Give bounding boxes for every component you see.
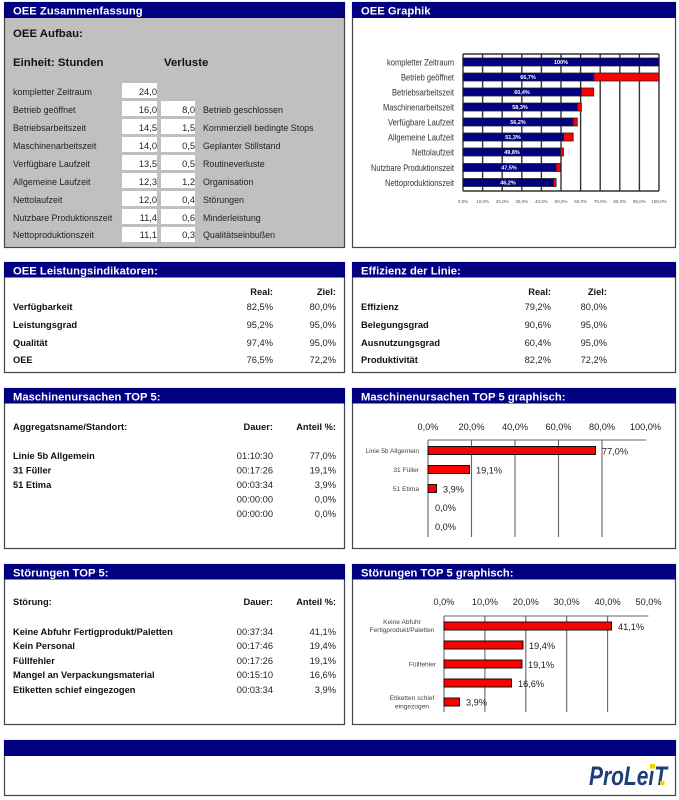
table: time values and losses bbox=[13, 83, 314, 242]
header: OEE Leistungsindikatoren: OEE Leistungsindikatoren: bbox=[13, 266, 158, 278]
table: machine causes: Linie 5b Allgemein bbox=[13, 451, 95, 461]
chart: machine causes bars bbox=[365, 422, 661, 537]
chart: OEE stacked bars: 20,0% bbox=[496, 199, 509, 204]
table: disturbances: Störung: bbox=[13, 597, 52, 607]
table: machine causes: 3,9% bbox=[315, 480, 336, 490]
header: Maschinenursachen TOP 5 bbox=[4, 388, 345, 404]
table: time values and losses: 0,6 bbox=[182, 213, 195, 223]
chart: disturbance bars bbox=[370, 597, 662, 712]
table: time values and losses: Qualitätseinbußen bbox=[203, 230, 275, 240]
table: time values and losses: 11,1 bbox=[140, 230, 157, 240]
table: disturbances: Mangel an Verpackungsmaterial bbox=[13, 670, 155, 680]
table: time values and losses: Nutzbare Produktionszeit bbox=[13, 213, 113, 223]
table: disturbances: 19,1% bbox=[310, 656, 336, 666]
panel: OEE Zusammenfassung bbox=[4, 2, 345, 248]
chart: machine causes bars: 51 Etima bbox=[393, 486, 419, 493]
table: line efficiency values: Real: bbox=[528, 287, 551, 297]
table: line efficiency values bbox=[361, 287, 607, 365]
chart: OEE stacked bars: 66,7% bbox=[520, 75, 536, 81]
table: disturbances: 3,9% bbox=[315, 685, 336, 695]
table: KPI values: 72,2% bbox=[310, 355, 336, 365]
table: disturbances: 00:17:46 bbox=[237, 641, 273, 651]
chart: disturbance bars: 19,1% bbox=[528, 660, 554, 670]
chart: disturbance bars: 10,0% bbox=[472, 597, 498, 607]
chart: OEE stacked bars: 60,0% bbox=[574, 199, 587, 204]
chart: OEE stacked bars: 40,0% bbox=[535, 199, 548, 204]
table: time values and losses: 1,2 bbox=[182, 177, 195, 187]
table: time values and losses: Maschinenarbeitszeit bbox=[13, 141, 97, 151]
chart: machine causes bars: 100,0% bbox=[630, 422, 661, 432]
chart: machine causes bars: 19,1% bbox=[476, 466, 502, 476]
table: KPI values: 82,5% bbox=[247, 302, 273, 312]
chart: OEE stacked bars: 0,0% bbox=[458, 199, 468, 204]
table: KPI values: Leistungsgrad bbox=[13, 320, 77, 330]
table: disturbances: Keine Abfuhr Fertigprodukt/Paletten bbox=[13, 627, 173, 637]
table: KPI values: Ziel: bbox=[317, 287, 336, 297]
table: KPI values: 95,2% bbox=[247, 320, 273, 330]
header: OEE Graphik bbox=[352, 2, 676, 18]
chart: machine causes bars: 20,0% bbox=[458, 422, 485, 432]
chart: OEE stacked bars: 58,3% bbox=[512, 105, 528, 111]
chart: disturbance bars: 40,0% bbox=[595, 597, 621, 607]
chart: disturbance bars: Etiketten schief bbox=[390, 695, 435, 702]
table: time values and losses: 1,5 bbox=[182, 123, 195, 133]
table: disturbances: Dauer: bbox=[244, 597, 273, 607]
table: line efficiency values: 90,6% bbox=[525, 320, 551, 330]
chart: OEE stacked bars: 100,0% bbox=[651, 199, 667, 204]
panel: OEE Graphik bbox=[352, 2, 676, 248]
table: disturbances: Füllfehler bbox=[13, 656, 55, 666]
chart: disturbance bars: Fertigprodukt/Paletten bbox=[370, 627, 435, 634]
table: time values and losses: Betrieb geschlossen bbox=[203, 105, 283, 115]
table: disturbances: 19,4% bbox=[310, 641, 336, 651]
table: line efficiency values: 79,2% bbox=[525, 302, 551, 312]
table: disturbances: Kein Personal bbox=[13, 641, 75, 651]
table: time values and losses: kompletter Zeitraum bbox=[13, 87, 92, 97]
header: OEE Zusammenfassung: OEE Zusammenfassung bbox=[13, 6, 143, 18]
header: Maschinenursachen TOP 5 graphisch: Maschinenursachen TOP 5 graphisch: bbox=[361, 392, 566, 404]
table: time values and losses: Geplanter Stillstand bbox=[203, 141, 281, 151]
table: line efficiency values: 60,4% bbox=[525, 338, 551, 348]
table: time values and losses: 14,0 bbox=[139, 141, 157, 151]
table: machine causes: 31 Füller bbox=[13, 466, 52, 476]
chart: OEE stacked bars: 90,0% bbox=[633, 199, 646, 204]
table: machine causes: 0,0% bbox=[315, 494, 336, 504]
table: time values and losses: 13,5 bbox=[139, 159, 157, 169]
table: time values and losses: 14,5 bbox=[139, 123, 157, 133]
chart: machine causes bars: 40,0% bbox=[502, 422, 528, 432]
chart: OEE stacked bars: 70,0% bbox=[594, 199, 607, 204]
table: time values and losses: Kommerziell bedingte Stops bbox=[203, 123, 314, 133]
header: OEE Graphik: OEE Graphik bbox=[361, 6, 431, 18]
header: Effizienz der Linie: Effizienz der Linie: bbox=[361, 266, 461, 278]
table: time values and losses: 0,4 bbox=[182, 195, 195, 205]
header: Effizienz der Linie bbox=[352, 262, 676, 278]
header: OEE Zusammenfassung bbox=[4, 2, 345, 18]
chart: machine causes bars: Linie 5b Allgemein bbox=[365, 448, 419, 455]
table: machine causes: 00:00:00 bbox=[237, 509, 273, 519]
table: disturbances: Etiketten schief eingezogen bbox=[13, 685, 136, 695]
chart: disturbance bars: 0,0% bbox=[434, 597, 454, 607]
table: disturbances: 41,1% bbox=[310, 627, 336, 637]
table: line efficiency values: 82,2% bbox=[525, 355, 551, 365]
header: Störungen TOP 5: Störungen TOP 5: bbox=[13, 568, 108, 580]
table: line efficiency values: Belegungsgrad bbox=[361, 320, 429, 330]
table: time values and losses: 0,5 bbox=[182, 159, 195, 169]
table: KPI values: 80,0% bbox=[310, 302, 336, 312]
table: machine causes: Aggregatsname/Standort: bbox=[13, 422, 127, 432]
chart: disturbance bars: 20,0% bbox=[513, 597, 539, 607]
table: time values and losses: 0,5 bbox=[182, 141, 195, 151]
header: Maschinenursachen TOP 5: Maschinenursachen TOP 5: bbox=[13, 392, 161, 404]
table: line efficiency values: Ziel: bbox=[588, 287, 607, 297]
table: machine causes: 00:17:26 bbox=[237, 466, 273, 476]
table: time values and losses: 8,0 bbox=[182, 105, 195, 115]
table: time values and losses: 0,3 bbox=[182, 230, 195, 240]
table: KPI values: 97,4% bbox=[247, 338, 273, 348]
table: KPI values: 76,5% bbox=[247, 355, 273, 365]
panel: Effizienz der Linie bbox=[352, 262, 676, 372]
table: time values and losses: 24,0 bbox=[139, 87, 157, 97]
chart: machine causes bars: 0,0% bbox=[418, 422, 438, 432]
chart: OEE stacked bars: 49,8% bbox=[504, 150, 520, 156]
chart: OEE stacked bars: 47,5% bbox=[501, 166, 517, 172]
chart: OEE stacked bars: 10,0% bbox=[476, 199, 489, 204]
panel: Maschinenursachen TOP 5 graphisch bbox=[352, 388, 676, 548]
table: KPI values bbox=[13, 287, 336, 365]
table: machine causes: Dauer: bbox=[244, 422, 273, 432]
chart: OEE stacked bars: 80,0% bbox=[613, 199, 626, 204]
chart: disturbance bars: 19,4% bbox=[529, 641, 555, 651]
table: disturbances: 00:37:34 bbox=[237, 627, 273, 637]
chart: disturbance bars: eingezogen bbox=[395, 704, 429, 710]
table: disturbances: 16,6% bbox=[310, 670, 336, 680]
table: time values and losses: Betriebsarbeitszeit bbox=[13, 123, 87, 133]
chart: OEE stacked bars: 60,4% bbox=[514, 90, 530, 96]
chart: OEE stacked bars: Nutzbare Produktionszeit bbox=[371, 163, 454, 174]
table: line efficiency values: 72,2% bbox=[581, 355, 607, 365]
chart: machine causes bars: 0,0% bbox=[435, 503, 456, 513]
panel: Störungen TOP 5 graphisch bbox=[352, 564, 676, 724]
table: machine causes: 51 Etima bbox=[13, 480, 52, 490]
header: Störungen TOP 5 graphisch: Störungen TOP 5 graphisch: bbox=[361, 568, 514, 580]
chart: machine causes bars: 0,0% bbox=[435, 522, 456, 532]
table: machine causes: 77,0% bbox=[310, 451, 336, 461]
table: machine causes: Anteil %: bbox=[296, 422, 336, 432]
chart: OEE stacked bars: Betrieb geöffnet bbox=[401, 72, 454, 84]
chart: disturbance bars: 16,6% bbox=[518, 679, 544, 689]
chart: disturbance bars: 30,0% bbox=[554, 597, 580, 607]
table: machine causes: 0,0% bbox=[315, 509, 336, 519]
chart: OEE stacked bars: 46,2% bbox=[500, 180, 516, 186]
chart: OEE stacked bars: Maschinenarbeitszeit bbox=[383, 102, 454, 114]
table: time values and losses: Minderleistung bbox=[203, 213, 261, 223]
table: KPI values: Real: bbox=[250, 287, 273, 297]
chart: disturbance bars: Füllfehler bbox=[409, 662, 437, 668]
chart: disturbance bars: 3,9% bbox=[466, 698, 487, 708]
heading: OEE Aufbau: OEE Aufbau: bbox=[13, 28, 83, 40]
chart: OEE stacked bars: kompletter Zeitraum bbox=[387, 58, 454, 68]
chart: OEE stacked bars: 100% bbox=[554, 60, 568, 66]
table: disturbances: 00:17:26 bbox=[237, 656, 273, 666]
chart: OEE stacked bars: Betriebsarbeitszeit bbox=[392, 88, 454, 98]
chart: machine causes bars: 3,9% bbox=[443, 484, 464, 494]
table: KPI values: 95,0% bbox=[310, 320, 336, 330]
table: disturbances bbox=[13, 597, 336, 695]
table: disturbances: Anteil %: bbox=[296, 597, 336, 607]
table: time values and losses: Verfügbare Laufzeit bbox=[13, 159, 91, 169]
chart: disturbance bars: 41,1% bbox=[618, 622, 644, 632]
table: time values and losses: Nettoproduktionszeit bbox=[13, 230, 94, 240]
chart: OEE stacked bars: 30,0% bbox=[515, 199, 528, 204]
table: KPI values: Qualität bbox=[13, 338, 48, 348]
chart: OEE stacked bars: 51,3% bbox=[505, 135, 521, 141]
chart: machine causes bars: 77,0% bbox=[602, 446, 628, 456]
table: KPI values: Verfügbarkeit bbox=[13, 302, 72, 312]
chart: OEE stacked bars bbox=[371, 54, 667, 204]
chart: OEE stacked bars: Nettoproduktionszeit bbox=[385, 178, 454, 189]
table: time values and losses: Organisation bbox=[203, 177, 253, 187]
table: KPI values: OEE bbox=[13, 355, 33, 365]
chart: disturbance bars: Keine Abfuhr bbox=[383, 619, 422, 626]
table: disturbances: 00:15:10 bbox=[237, 670, 273, 680]
panel: Störungen TOP 5 bbox=[4, 564, 345, 724]
table: machine causes: 01:10:30 bbox=[237, 451, 273, 461]
table: time values and losses: 16,0 bbox=[139, 105, 157, 115]
table: time values and losses: 11,4 bbox=[140, 213, 157, 223]
chart: disturbance bars: 50,0% bbox=[635, 597, 662, 607]
table: disturbances: 00:03:34 bbox=[237, 685, 273, 695]
footer bar bbox=[4, 740, 676, 756]
table: time values and losses: Routineverluste bbox=[203, 159, 265, 169]
table: time values and losses: Nettolaufzeit bbox=[13, 195, 63, 205]
table: line efficiency values: Effizienz bbox=[361, 302, 399, 312]
chart: OEE stacked bars: Nettolaufzeit bbox=[412, 148, 454, 158]
table: machine causes: 00:03:34 bbox=[237, 480, 273, 490]
header: Störungen TOP 5 graphisch bbox=[352, 564, 676, 580]
chart: OEE stacked bars: 50,0% bbox=[555, 199, 567, 204]
header: OEE Leistungsindikatoren bbox=[4, 262, 345, 278]
table: KPI values: 95,0% bbox=[310, 338, 336, 348]
chart: OEE stacked bars: Verfügbare Laufzeit bbox=[388, 118, 454, 128]
chart: machine causes bars: 31 Füller bbox=[393, 467, 420, 474]
table: time values and losses: Störungen bbox=[203, 195, 244, 205]
heading: Einheit Stunden: Einheit: Stunden bbox=[13, 57, 104, 69]
table: time values and losses: Betrieb geöffnet bbox=[13, 105, 76, 115]
table: time values and losses: Allgemeine Laufzeit bbox=[13, 177, 91, 187]
table: line efficiency values: 80,0% bbox=[581, 302, 607, 312]
table: line efficiency values: 95,0% bbox=[581, 320, 607, 330]
table: machine causes: 00:00:00 bbox=[237, 494, 273, 504]
chart: machine causes bars: 80,0% bbox=[589, 422, 615, 432]
panel: Maschinenursachen TOP 5 bbox=[4, 388, 345, 548]
table: line efficiency values: Ausnutzungsgrad bbox=[361, 338, 440, 348]
heading: Verluste: Verluste bbox=[164, 57, 208, 69]
panel: footer bbox=[4, 740, 676, 796]
table: machine causes: 19,1% bbox=[310, 466, 336, 476]
chart: OEE stacked bars: 56,2% bbox=[510, 120, 526, 126]
table: time values and losses: 12,3 bbox=[139, 177, 157, 187]
table: time values and losses: 12,0 bbox=[139, 195, 157, 205]
chart: machine causes bars: 60,0% bbox=[545, 422, 572, 432]
table: machine causes bbox=[13, 422, 336, 519]
table: line efficiency values: Produktivität bbox=[361, 355, 418, 365]
header: Maschinenursachen TOP 5 graphisch bbox=[352, 388, 676, 404]
header: Störungen TOP 5 bbox=[4, 564, 345, 580]
table: line efficiency values: 95,0% bbox=[581, 338, 607, 348]
panel: OEE Leistungsindikatoren bbox=[4, 262, 345, 372]
chart: OEE stacked bars: Allgemeine Laufzeit bbox=[388, 132, 454, 144]
